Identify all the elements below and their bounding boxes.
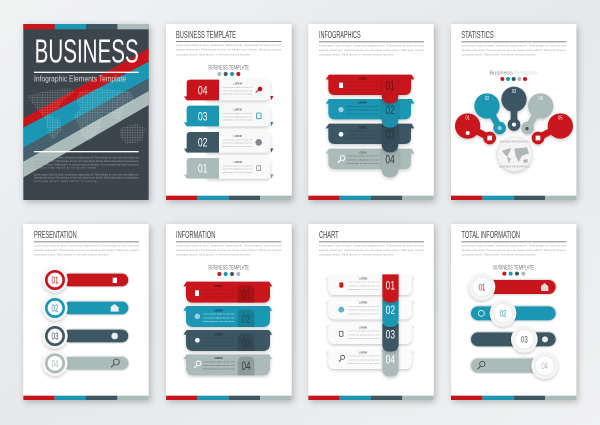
row 02 <box>326 99 414 128</box>
row 02: consectetur adipiscing nunc nisi <box>346 109 379 112</box>
intro text <box>461 244 567 257</box>
row 01: Lorem ipsum dolor sit amet elit <box>222 164 253 167</box>
intro text: Lorem ipsum dolor sit amet, consectetur adipiscing elit. Pellentesque ac nunc nisi enim <box>461 244 566 247</box>
bottom colour strip <box>166 196 292 200</box>
heading: STATISTICS <box>461 30 494 41</box>
bottom colour strip <box>166 396 292 400</box>
intro text: egestas elementum. Pellentesque at nunc vel massa luctus laoreet. Maecenas posuere <box>319 49 425 52</box>
row 04: 04 <box>51 359 59 370</box>
cover body text: consequat dictum. Nulla facilisi. In vehicula. <box>34 180 98 183</box>
intro text: egestas elementum. Pellentesque at nunc vel massa luctus laoreet. Maecenas posuere <box>176 49 282 52</box>
panel: cover <box>23 24 149 200</box>
cover title: BUSINESS <box>35 34 139 71</box>
cover top colour strip <box>23 24 149 29</box>
row 02: 02 <box>51 304 59 315</box>
cover lower rule <box>34 151 139 152</box>
node 01 <box>455 113 496 144</box>
row 04: 04 <box>198 83 208 97</box>
row 04: pellentesque at nunc vel massa <box>348 362 380 365</box>
intro text: egestas elementum. Pellentesque at nunc vel massa luctus laoreet. Maecenas posuere <box>176 249 282 252</box>
row 01: 01 <box>51 276 59 287</box>
row 01: LOREM <box>359 278 367 280</box>
row 03: consectetur adipiscing nunc nisi <box>348 333 380 336</box>
icon: globe <box>338 107 344 112</box>
bottom colour strip <box>308 196 434 200</box>
row 01: 01 <box>241 288 251 302</box>
row 01: 01 <box>198 162 208 176</box>
centre globe badge <box>497 137 532 171</box>
row 01: pellentesque at nunc vel massa <box>348 288 380 291</box>
row 01: 01 <box>386 279 395 293</box>
icon: cup <box>257 166 261 171</box>
row 04: consectetur adipiscing nunc nisi <box>346 158 379 161</box>
row 04: pellentesque at nunc vel massa <box>203 368 235 371</box>
row 02 <box>470 300 556 327</box>
row 04: pellentesque at nunc vel massa <box>346 162 379 165</box>
row 03: LOREM <box>214 334 223 336</box>
centre globe badge: BUSINESS INFOGRAPHICS <box>500 141 530 144</box>
intro text: egestas elementum. Pellentesque at nunc vel massa luctus laoreet. Maecenas posuere <box>34 249 140 252</box>
row 01: pellentesque at nunc vel massa <box>222 171 253 174</box>
row 02: pellentesque at nunc vel massa <box>346 112 379 115</box>
cover body text <box>34 157 139 183</box>
icon: pin <box>256 90 259 93</box>
diagonal stripes <box>23 48 149 177</box>
legend dots <box>217 72 240 76</box>
node 05 <box>532 113 573 144</box>
row 02: LOREM <box>358 103 367 105</box>
row 03 <box>325 323 416 352</box>
row 04 <box>184 80 273 100</box>
row 04: LOREM <box>214 358 223 360</box>
row 04: LOREM <box>358 152 367 154</box>
row 04: 04 <box>385 153 395 167</box>
row 01: Lorem ipsum dolor sit amet elit <box>348 281 379 284</box>
panel: infographics <box>308 24 434 200</box>
row 04: LOREM <box>359 352 367 354</box>
sub heading: BUSINESS TEMPLATE <box>208 265 249 272</box>
sub heading: BUSINESS TEMPLATE <box>493 265 534 272</box>
panel: chart <box>308 224 434 400</box>
cover body text: egestas elementum. Pellentesque at nunc vel massa luctus laoreet. Maecenas posuere consequat mi <box>34 177 139 180</box>
row 01: 01 <box>479 282 485 292</box>
legend dots <box>500 77 527 81</box>
icon: document <box>339 83 343 88</box>
legend dots <box>502 272 525 276</box>
row 03: consectetur adipiscing nunc nisi <box>222 115 253 118</box>
heading: CHART <box>319 230 339 241</box>
row 02: Lorem ipsum dolor sit amet elit <box>203 313 235 316</box>
row 03: 03 <box>386 328 395 342</box>
row 02: Lorem ipsum dolor sit amet elit <box>222 138 253 141</box>
row 02 <box>42 295 129 321</box>
row 02 <box>325 299 416 327</box>
cover body text: consequat dictum. Nulla facilisi. In vehicula rhoncus faucibus. Sed commodo nisl vitae nunc amet <box>34 163 139 166</box>
row 02: Lorem ipsum dolor sit amet elit <box>346 105 379 108</box>
intro text: egestas elementum. Pellentesque at nunc vel massa luctus laoreet. Maecenas posuere <box>319 249 425 252</box>
node 01: 01 <box>465 115 470 121</box>
row 03: Lorem ipsum dolor sit amet elit <box>203 337 235 340</box>
row 04 <box>183 354 272 375</box>
intro text: egestas elementum. Pellentesque at nunc vel massa luctus laoreet. Maecenas posuere <box>461 49 567 52</box>
icon: disc <box>255 139 262 146</box>
row 03 <box>326 124 414 152</box>
dotted world map <box>27 88 145 144</box>
row 03: pellentesque at nunc vel massa <box>222 119 253 122</box>
panel: total information <box>451 224 576 400</box>
cover body text: Lorem ipsum dolor sit amet, consectetur adipiscing elit. Pellentesque ac nunc nisi enim ligula sed <box>34 173 139 176</box>
row 04: 04 <box>541 361 548 371</box>
intro text: consequat dictum. Nulla facilisi. In vehicula rhoncus faucibus. <box>176 254 251 257</box>
row 04: Lorem ipsum dolor sit amet elit <box>203 360 235 363</box>
row 02 <box>183 306 272 327</box>
row 02: pellentesque at nunc vel massa <box>348 312 380 315</box>
intro text <box>34 244 140 257</box>
row 04: LOREM <box>233 84 242 86</box>
centre globe badge: BUSINESS INFOGRAPHICS <box>500 165 530 168</box>
intro text <box>176 244 282 257</box>
row 03: 03 <box>385 128 395 142</box>
row 04: Lorem ipsum dolor sit amet elit <box>222 86 253 89</box>
icon: magnifier <box>340 156 345 160</box>
row 03: LOREM <box>358 127 367 129</box>
row 02: 02 <box>241 312 251 326</box>
node 02 <box>474 93 506 134</box>
intro text: egestas elementum. Pellentesque at nunc vel massa luctus laoreet. Maecenas posuere <box>461 249 567 252</box>
intro text <box>319 44 425 57</box>
row 02: consectetur adipiscing nunc nisi <box>348 309 380 312</box>
row 01: pellentesque at nunc vel massa <box>346 88 379 91</box>
row 04 <box>326 149 414 177</box>
bottom colour strip <box>451 196 576 200</box>
row 04: Lorem ipsum dolor sit amet elit <box>346 155 379 158</box>
intro text <box>176 44 282 56</box>
cover title rule <box>34 72 139 73</box>
row 04: 04 <box>241 359 251 373</box>
row 03 <box>470 326 556 353</box>
row 01: pellentesque at nunc vel massa <box>203 296 235 299</box>
row 01 <box>183 282 272 303</box>
intro text: consequat dictum. Nulla facilisi. In vehicula rhoncus faucibus. <box>461 254 537 257</box>
node 04: 04 <box>538 96 543 102</box>
row 02: Lorem ipsum dolor sit amet elit <box>348 305 379 308</box>
row 01: Lorem ipsum dolor sit amet elit <box>203 288 235 291</box>
legend dots <box>217 272 240 276</box>
row 03: consectetur adipiscing nunc nisi <box>346 133 379 136</box>
row 04: consectetur adipiscing nunc nisi <box>203 364 235 367</box>
panel: information <box>166 224 292 400</box>
row 03: pellentesque at nunc vel massa <box>346 137 379 140</box>
node 03 <box>501 87 527 131</box>
intro text: consequat dictum. Nulla facilisi. In vehicula rhoncus faucibus. <box>319 54 394 57</box>
row 02: 02 <box>198 136 208 150</box>
sub heading: Business Template <box>489 70 538 76</box>
row 04: 04 <box>386 353 395 367</box>
intro text: consequat dictum. Nulla facilisi. In vehicula rhoncus faucibus. <box>461 54 537 57</box>
row 04 <box>42 351 129 376</box>
row 01 <box>325 274 416 303</box>
panel: statistics <box>451 24 576 200</box>
heading: INFORMATION <box>176 230 215 241</box>
row 03: 03 <box>51 332 59 343</box>
row 01 <box>42 267 129 293</box>
row 02 <box>184 132 273 153</box>
row 01: Lorem ipsum dolor sit amet elit <box>346 81 379 84</box>
intro text: Lorem ipsum dolor sit amet, consectetur adipiscing elit. Pellentesque ac nunc nisi enim <box>176 244 281 247</box>
row 03: LOREM <box>359 327 367 329</box>
intro text: Lorem ipsum dolor sit amet, consectetur adipiscing elit. Pellentesque ac nunc nisi enim <box>34 244 139 247</box>
cover body text: egestas elementum. Pellentesque at nunc vel massa luctus laoreet. Maecenas posuere consequat mi <box>34 160 139 163</box>
intro text <box>461 44 567 57</box>
row 01 <box>326 75 414 103</box>
heading: INFOGRAPHICS <box>319 30 361 41</box>
row 02: 02 <box>385 103 395 117</box>
intro text: Lorem ipsum dolor sit amet, consectetur adipiscing elit. Pellentesque ac nunc nisi enim <box>319 244 424 247</box>
bottom colour strip <box>23 396 149 400</box>
bottom colour strip <box>308 396 434 400</box>
row 02: 02 <box>386 303 395 317</box>
icon: calendar <box>257 113 261 119</box>
cover subtitle: Infographic Elements Template <box>34 75 126 84</box>
row 02: LOREM <box>233 136 242 138</box>
row 03: Lorem ipsum dolor sit amet elit <box>348 330 379 333</box>
row 01 <box>184 158 273 179</box>
row 02: pellentesque at nunc vel massa <box>203 320 235 323</box>
row 03: pellentesque at nunc vel massa <box>348 337 380 340</box>
row 03: Lorem ipsum dolor sit amet elit <box>346 130 379 133</box>
row 02: LOREM <box>214 310 223 312</box>
row 02: consectetur adipiscing nunc nisi <box>222 142 253 145</box>
row 01: consectetur adipiscing nunc nisi <box>348 284 380 287</box>
row 04: consectetur adipiscing nunc nisi <box>348 358 380 361</box>
intro text: consequat dictum. Nulla facilisi. In vehicula rhoncus faucibus. <box>34 254 109 257</box>
panel: business template <box>166 24 292 200</box>
row 02: consectetur adipiscing nunc nisi <box>203 316 235 319</box>
row 04: consectetur adipiscing nunc nisi <box>222 89 253 92</box>
row 02: pellentesque at nunc vel massa <box>222 145 253 148</box>
node 04 <box>521 93 553 134</box>
row 03: pellentesque at nunc vel massa <box>203 344 235 347</box>
node 02: 02 <box>485 96 489 102</box>
row 01: LOREM <box>358 78 367 80</box>
row 04: Lorem ipsum dolor sit amet elit <box>348 355 379 358</box>
cover body text: Curabitur vitae sapien at nisl dictum tempor. <box>34 167 98 170</box>
row 02: LOREM <box>359 303 367 305</box>
intro text: Lorem ipsum dolor sit amet, consectetur adipiscing elit. Pellentesque ac nunc nisi enim <box>176 44 281 47</box>
sub heading: BUSINESS TEMPLATE <box>208 65 249 72</box>
row 01 <box>469 274 556 300</box>
row 01: LOREM <box>233 162 242 164</box>
bottom colour strip <box>451 396 576 400</box>
row 03 <box>184 106 273 126</box>
intro text: Lorem ipsum dolor sit amet, consectetur adipiscing elit. Pellentesque ac nunc nisi enim <box>319 44 424 47</box>
intro text: Lorem ipsum dolor sit amet, consectetur adipiscing elit. Pellentesque ac nunc nisi enim <box>461 44 566 47</box>
heading: PRESENTATION <box>34 230 77 241</box>
row 01: LOREM <box>214 286 223 288</box>
row 04 <box>325 348 416 377</box>
row 03 <box>183 330 272 351</box>
node 03: 03 <box>512 89 516 95</box>
row 03: 03 <box>198 109 208 123</box>
heading: BUSINESS TEMPLATE <box>176 30 236 41</box>
row 03: Lorem ipsum dolor sit amet elit <box>222 112 253 115</box>
intro text: consequat dictum. Nulla facilisi. In vehicula rhoncus faucibus. <box>319 254 394 257</box>
row 01: consectetur adipiscing nunc nisi <box>222 168 253 171</box>
panel: presentation <box>23 224 149 400</box>
row 01: consectetur adipiscing nunc nisi <box>346 84 379 87</box>
icon: disc <box>339 132 343 137</box>
row 03 <box>42 323 129 349</box>
row 01: 01 <box>385 79 395 93</box>
intro text: consequat dictum. Nulla facilisi. In vehicula rhoncus faucibus. <box>176 53 251 56</box>
row 02: 02 <box>500 309 506 319</box>
row 01: consectetur adipiscing nunc nisi <box>203 292 235 295</box>
row 03: 03 <box>241 336 251 350</box>
row 03: consectetur adipiscing nunc nisi <box>203 340 235 343</box>
row 04 <box>470 352 558 379</box>
row 03: 03 <box>521 335 528 345</box>
row 04: pellentesque at nunc vel massa <box>222 93 253 96</box>
heading: TOTAL INFORMATION <box>461 230 520 241</box>
row 03: LOREM <box>233 110 242 112</box>
node 05: 05 <box>558 115 562 121</box>
cover body text: Lorem ipsum dolor sit amet, consectetur adipiscing elit. Pellentesque ac nunc nisi enim ligula sed <box>34 157 139 160</box>
intro text <box>319 244 425 257</box>
